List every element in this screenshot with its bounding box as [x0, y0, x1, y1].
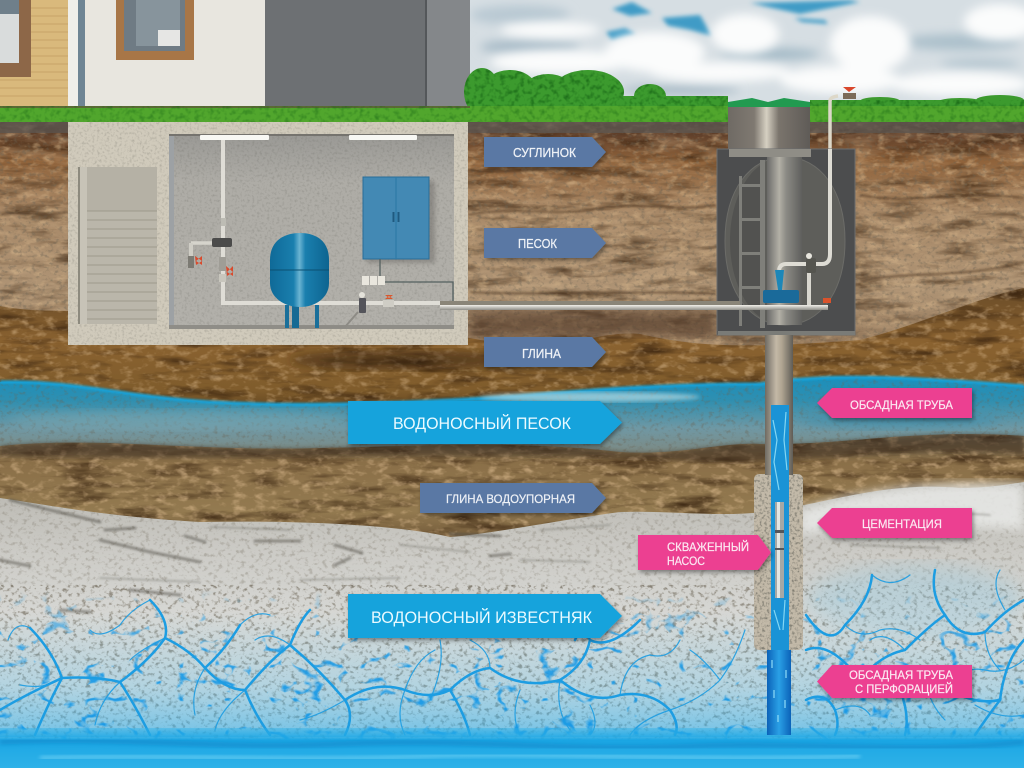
steel casing — [765, 335, 793, 475]
soil: loam and sand — [0, 122, 1024, 362]
label: casing pipe: ОБСАДНАЯ ТРУБА — [850, 398, 953, 412]
label: impermeable clay — [420, 483, 606, 513]
horizontal supply pipe — [440, 301, 828, 310]
label: perforated casing: ОБСАДНАЯ ТРУБА — [849, 668, 953, 682]
label: impermeable clay: ГЛИНА ВОДОУПОРНАЯ — [446, 492, 575, 506]
label: submersible pump: СКВАЖЕННЫЙ — [667, 539, 749, 554]
fine water veins in limestone — [0, 590, 1024, 740]
cement grout — [754, 474, 803, 650]
pump head in chamber — [763, 253, 831, 303]
expansion tank — [270, 233, 329, 328]
label: cementing — [817, 508, 972, 538]
blue water cracks in limestone — [0, 570, 1024, 735]
window centre — [116, 0, 194, 60]
perforated casing — [767, 650, 791, 735]
submersible pump — [775, 502, 784, 598]
label: perforated casing: С ПЕРФОРАЦИЕЙ — [855, 681, 953, 696]
label: water-bearing sand — [348, 401, 622, 444]
soil: dark clay layer — [0, 288, 1024, 425]
label: sand: ПЕСОК — [518, 236, 557, 251]
sky with clouds — [470, 0, 1024, 110]
hydraulic fittings and valves — [188, 238, 394, 313]
ladder — [739, 160, 765, 328]
label: loam: СУГЛИНОК — [513, 145, 576, 160]
label: water-bearing limestone — [348, 594, 622, 638]
chamber neck and green lid — [728, 98, 810, 150]
layer: water-bearing sand — [0, 377, 1024, 470]
label: perforated casing — [817, 665, 972, 698]
label: submersible pump: НАСОС — [667, 554, 705, 568]
basement room interior — [169, 134, 454, 329]
riser valve — [830, 87, 856, 149]
label: sand — [484, 228, 606, 258]
house facade — [0, 0, 470, 106]
label: clay — [484, 337, 606, 367]
wiring and sockets — [362, 259, 453, 303]
grass strip — [0, 106, 1024, 122]
trees — [464, 68, 1024, 116]
label: cementing: ЦЕМЕНТАЦИЯ — [862, 517, 942, 531]
electrical cabinet — [363, 177, 435, 263]
water inside casing — [771, 405, 789, 650]
chamber body — [717, 149, 855, 335]
label: water-bearing sand: ВОДОНОСНЫЙ ПЕСОК — [393, 414, 571, 433]
bottom groundwater — [0, 728, 1024, 768]
chamber pipework — [779, 149, 830, 306]
ceiling lights — [200, 135, 417, 140]
label: clay: ГЛИНА — [522, 346, 561, 361]
layer: impermeable clay — [0, 434, 1024, 545]
label: water-bearing limestone: ВОДОНОСНЫЙ ИЗВЕСТНЯК — [371, 608, 592, 627]
label: submersible pump — [638, 535, 771, 570]
staircase — [78, 167, 157, 324]
basement concrete shell — [68, 122, 468, 345]
white water pipes — [191, 140, 440, 327]
label: casing pipe — [817, 388, 972, 418]
basement — [68, 122, 468, 345]
layer: limestone — [0, 482, 1024, 768]
well chamber — [717, 87, 856, 335]
window left — [0, 0, 31, 77]
label: loam — [484, 137, 606, 167]
borehole — [754, 335, 803, 735]
